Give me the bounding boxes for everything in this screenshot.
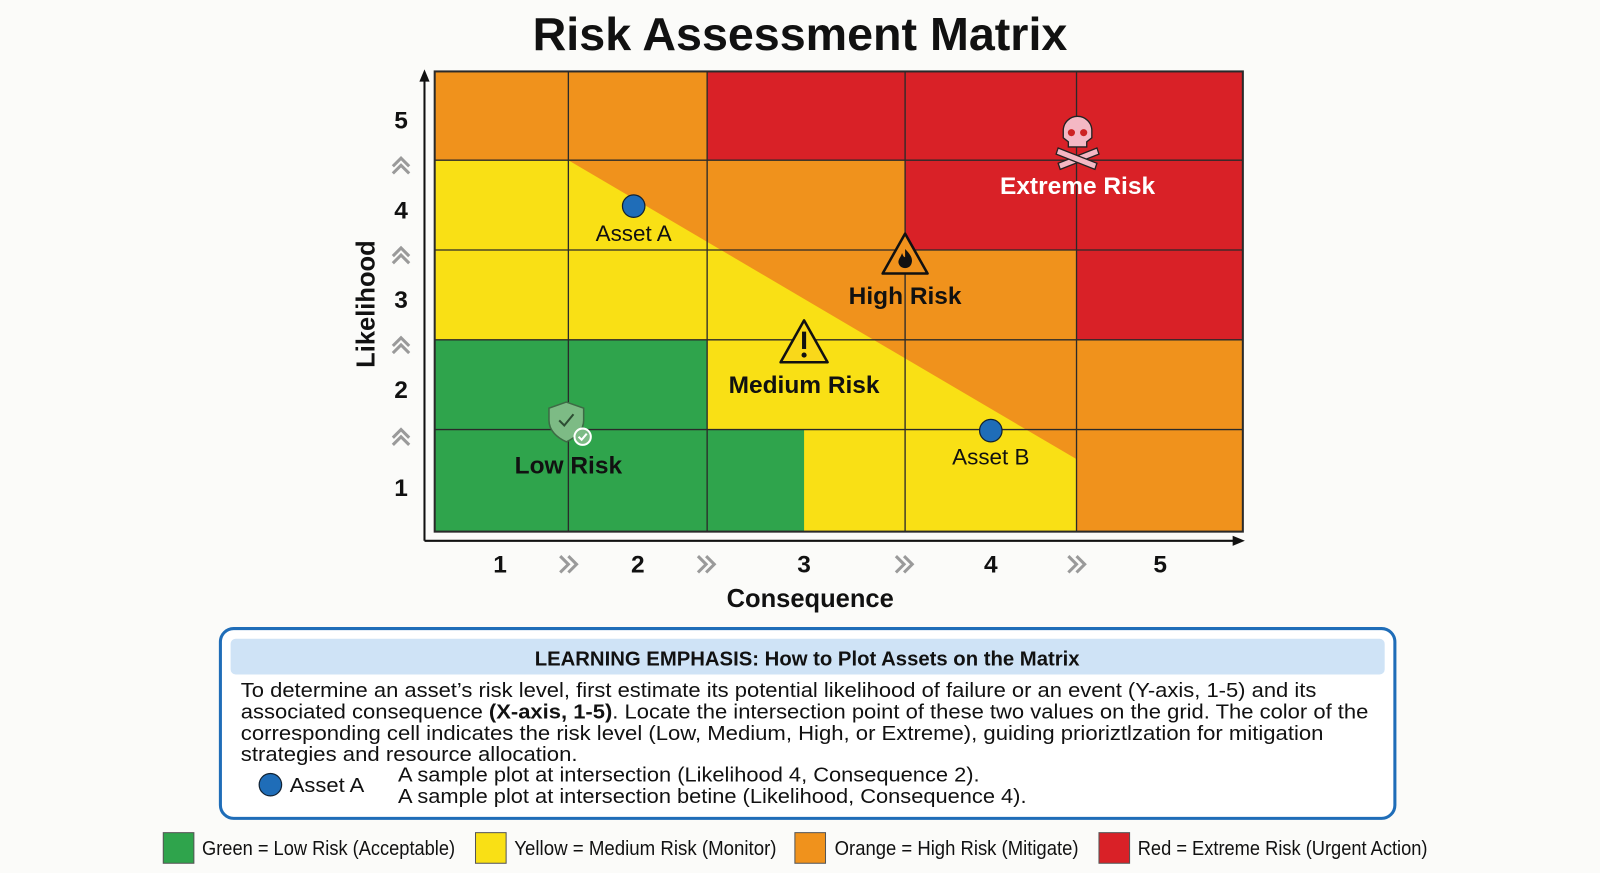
y axis labels: 4 xyxy=(394,197,408,224)
x axis xyxy=(424,536,1245,546)
panel header xyxy=(231,639,1385,674)
y axis labels: 5 xyxy=(394,108,408,135)
x axis labels: 5 xyxy=(1153,551,1167,578)
icon: shield xyxy=(549,402,591,445)
icon: fire warning xyxy=(883,234,928,273)
sample asset legend xyxy=(259,765,1027,808)
label: Low Risk: Low Risk xyxy=(515,452,622,479)
icon: skull xyxy=(1056,116,1099,169)
color legend: Green = Low Risk (Acceptable) xyxy=(202,838,455,860)
panel: learning emphasis xyxy=(220,629,1395,818)
panel body text: To determine an asset’s risk level, first estimate its potential likelihood of failure or an event (Y-axis, 1-5) and its xyxy=(241,680,1316,702)
panel body text: associated consequence (X-axis, 1-5) . Locate the intersection point of these two values on the grid. The color of the xyxy=(241,701,1368,723)
icon: warning xyxy=(781,320,828,362)
x axis labels: 1 xyxy=(493,551,507,578)
title: Risk Assessment Matrix xyxy=(533,8,1068,60)
panel body text: strategies and resource allocation. xyxy=(241,744,578,766)
panel body text: corresponding cell indicates the risk level (Low, Medium, High, or Extreme), guiding prioriztlzation for mitigation xyxy=(241,723,1323,745)
marker: Asset A xyxy=(596,195,672,246)
y axis title: Likelihood xyxy=(352,240,380,368)
y axis labels: 3 xyxy=(394,287,408,314)
y axis labels xyxy=(393,108,409,502)
marker: Asset B xyxy=(952,419,1029,469)
x axis labels: 3 xyxy=(797,551,811,578)
sample asset legend: Asset A xyxy=(290,775,365,797)
x axis labels: 4 xyxy=(984,551,998,578)
matrix xyxy=(435,71,1243,532)
x axis title: Consequence xyxy=(727,585,894,613)
sample asset legend: A sample plot at intersection (Likelihood 4, Consequence 2). xyxy=(398,765,980,787)
x axis labels: 2 xyxy=(631,551,645,578)
panel body text xyxy=(241,680,1368,766)
marker: Asset A: Asset A xyxy=(596,221,672,246)
y axis labels: 2 xyxy=(394,377,408,404)
marker: Asset B: Asset B xyxy=(952,444,1029,469)
label: High Risk: High Risk xyxy=(849,283,962,310)
x axis labels xyxy=(493,551,1167,578)
panel header: LEARNING EMPHASIS: How to Plot Assets on the Matrix xyxy=(535,648,1080,670)
label: Extreme Risk: Extreme Risk xyxy=(1000,173,1155,200)
label: Medium Risk: Medium Risk xyxy=(729,372,880,399)
color legend: Orange = High Risk (Mitigate) xyxy=(835,838,1079,860)
sample asset legend: A sample plot at intersection betine (Likelihood, Consequence 4). xyxy=(398,786,1027,808)
color legend: Yellow = Medium Risk (Monitor) xyxy=(514,838,777,860)
y axis labels: 1 xyxy=(394,475,408,502)
y axis xyxy=(419,69,430,541)
color legend: Red = Extreme Risk (Urgent Action) xyxy=(1138,838,1428,860)
color legend xyxy=(163,833,1428,863)
